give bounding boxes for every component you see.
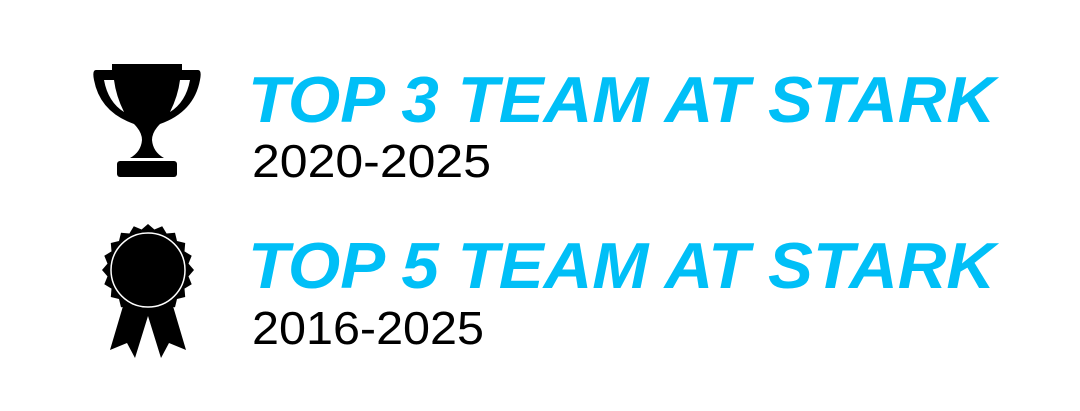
- icon: trophy: [93, 64, 201, 177]
- title: top 5: TOP 5 TEAM AT STARK: [248, 229, 999, 302]
- years: 2020-2025: 2020-2025: [252, 135, 491, 187]
- years: 2016-2025: 2016-2025: [252, 302, 484, 354]
- title: top 3: TOP 3 TEAM AT STARK: [248, 63, 999, 136]
- icon: medal: [102, 224, 194, 358]
